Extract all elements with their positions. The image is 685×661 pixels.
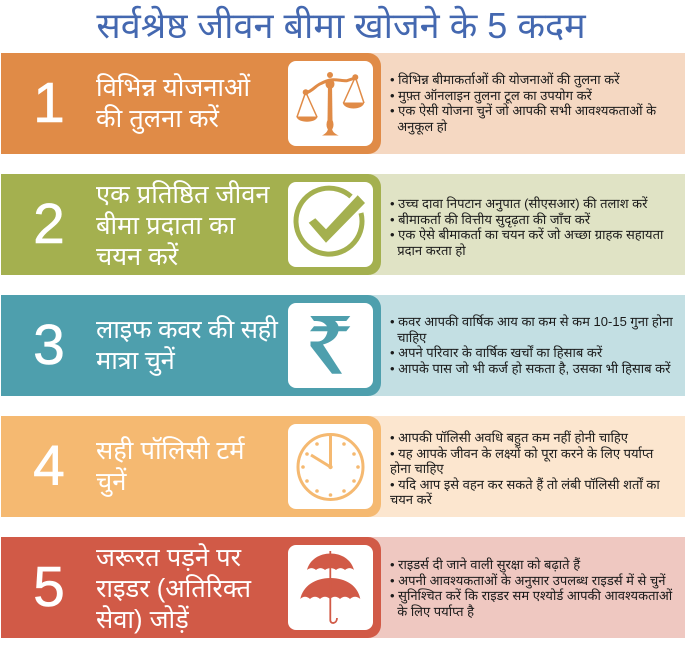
- step 5 number: 5: [33, 555, 65, 619]
- step 3 bullet list: • कवर आपकी वार्षिक आय का कम से कम 10-15 गुना होना: [390, 314, 673, 329]
- icon: rupee symbol: [288, 303, 373, 388]
- step 3 heading: [96, 315, 278, 376]
- icon: umbrellas: [288, 545, 373, 630]
- step 3 heading: मात्रा चुनें: [96, 347, 174, 375]
- panel: step 2: [1, 174, 381, 275]
- step 5 bullet list: • अपनी आवश्यकताओं के अनुसार उपलब्ध राइडर्स में से चुनें: [390, 573, 665, 588]
- icon: balance scale: [288, 61, 373, 146]
- panel: step 2 details background: [300, 174, 685, 275]
- step 3 bullet list: • अपने परिवार के वार्षिक खर्चों का हिसाब करें: [390, 345, 602, 360]
- icon: clock: [288, 424, 373, 509]
- step 4 bullet list: • यदि आप इसे वहन कर सकते हैं तो लंबी पॉलिसी शर्तों का: [390, 477, 660, 492]
- step 1 bullet list: • विभिन्न बीमाकर्ताओं की योजनाओं की तुलना करें: [390, 72, 620, 87]
- step 5 bullet list: • राइडर्स दी जाने वाली सुरक्षा को बढ़ाते हैं: [390, 557, 580, 572]
- step 3 heading: लाइफ कवर की सही: [96, 316, 278, 344]
- step 1 bullet list: अनुकूल हो: [397, 119, 447, 134]
- panel: step 3 details background: [300, 295, 685, 396]
- step 1 bullet list: • मुफ़्त ऑनलाइन तुलना टूल का उपयोग करें: [390, 88, 592, 103]
- panel: step 4: [1, 416, 381, 517]
- panel: step 1: [1, 53, 381, 154]
- step 2 bullet list: प्रदान करता हो: [397, 243, 466, 258]
- step 2 heading: एक प्रतिष्ठित जीवन: [96, 181, 270, 209]
- step 2 heading: बीमा प्रदाता का: [96, 212, 235, 240]
- step 2 bullet list: • एक ऐसे बीमाकर्ता का चयन करें जो अच्छा ग्राहक सहायता: [390, 227, 663, 242]
- step 1 heading: की तुलना करें: [96, 105, 219, 133]
- step 5 heading: जरूरत पड़ने पर: [96, 544, 241, 572]
- step 4 heading: [96, 436, 245, 497]
- step 4 heading: चुनें: [96, 468, 126, 496]
- panel: step 1 details background: [300, 53, 685, 154]
- step 5 heading: सेवा) जोड़ें: [96, 606, 189, 634]
- step 4 bullet list: [390, 430, 660, 507]
- step 2 bullet list: [390, 196, 664, 258]
- step 1 heading: विभिन्न योजनाओं: [96, 74, 250, 102]
- step 1 heading: [96, 73, 250, 134]
- panel: step 4 details background: [300, 416, 685, 517]
- step 5 heading: [96, 543, 252, 634]
- step 4 bullet list: • यह आपके जीवन के लक्ष्यों को पूरा करने के लिए पर्याप्त: [390, 446, 653, 461]
- panel: step 5: [1, 537, 381, 638]
- step 1 bullet list: [390, 72, 656, 135]
- step 3 bullet list: [390, 314, 673, 376]
- step 5 heading: राइडर (अतिरिक्त: [96, 575, 251, 603]
- step 3 number: 3: [33, 313, 65, 377]
- panel: step 3: [1, 295, 381, 396]
- step 5 bullet list: • सुनिश्चित करें कि राइडर सम एश्योर्ड आपकी आवश्यकताओं: [390, 588, 672, 603]
- step 2 number: 2: [33, 192, 65, 256]
- step 4 bullet list: चयन करें: [390, 492, 432, 507]
- step 3 bullet list: चाहिए: [397, 330, 426, 345]
- step 5 bullet list: के लिए पर्याप्त है: [397, 604, 474, 619]
- step 4 number: 4: [33, 434, 65, 498]
- panel: step 5 details background: [300, 537, 685, 638]
- step 4 bullet list: होना चाहिए: [390, 461, 444, 476]
- step 1 bullet list: • एक ऐसी योजना चुनें जो आपकी सभी आवश्यकताओं के: [390, 103, 656, 118]
- step 4 bullet list: • आपकी पॉलिसी अवधि बहुत कम नहीं होनी चाहिए: [390, 430, 628, 445]
- step 2 heading: चयन करें: [96, 243, 178, 271]
- step 3 bullet list: • आपके पास जो भी कर्ज हो सकता है, उसका भी हिसाब करें: [390, 361, 670, 376]
- step 2 bullet list: • उच्च दावा निपटान अनुपात (सीएसआर) की तलाश करें: [390, 196, 647, 211]
- step 2 heading: [96, 180, 270, 271]
- step 5 bullet list: [390, 557, 672, 619]
- icon: check mark in circle: [288, 182, 373, 267]
- step 2 bullet list: • बीमाकर्ता की वित्तीय सुदृढ़ता की जाँच करें: [390, 212, 590, 227]
- step 1 number: 1: [33, 71, 65, 135]
- title: सर्वश्रेष्ठ जीवन बीमा खोजने के 5 कदम: [96, 5, 586, 46]
- step 4 heading: सही पॉलिसी टर्म: [96, 437, 244, 465]
